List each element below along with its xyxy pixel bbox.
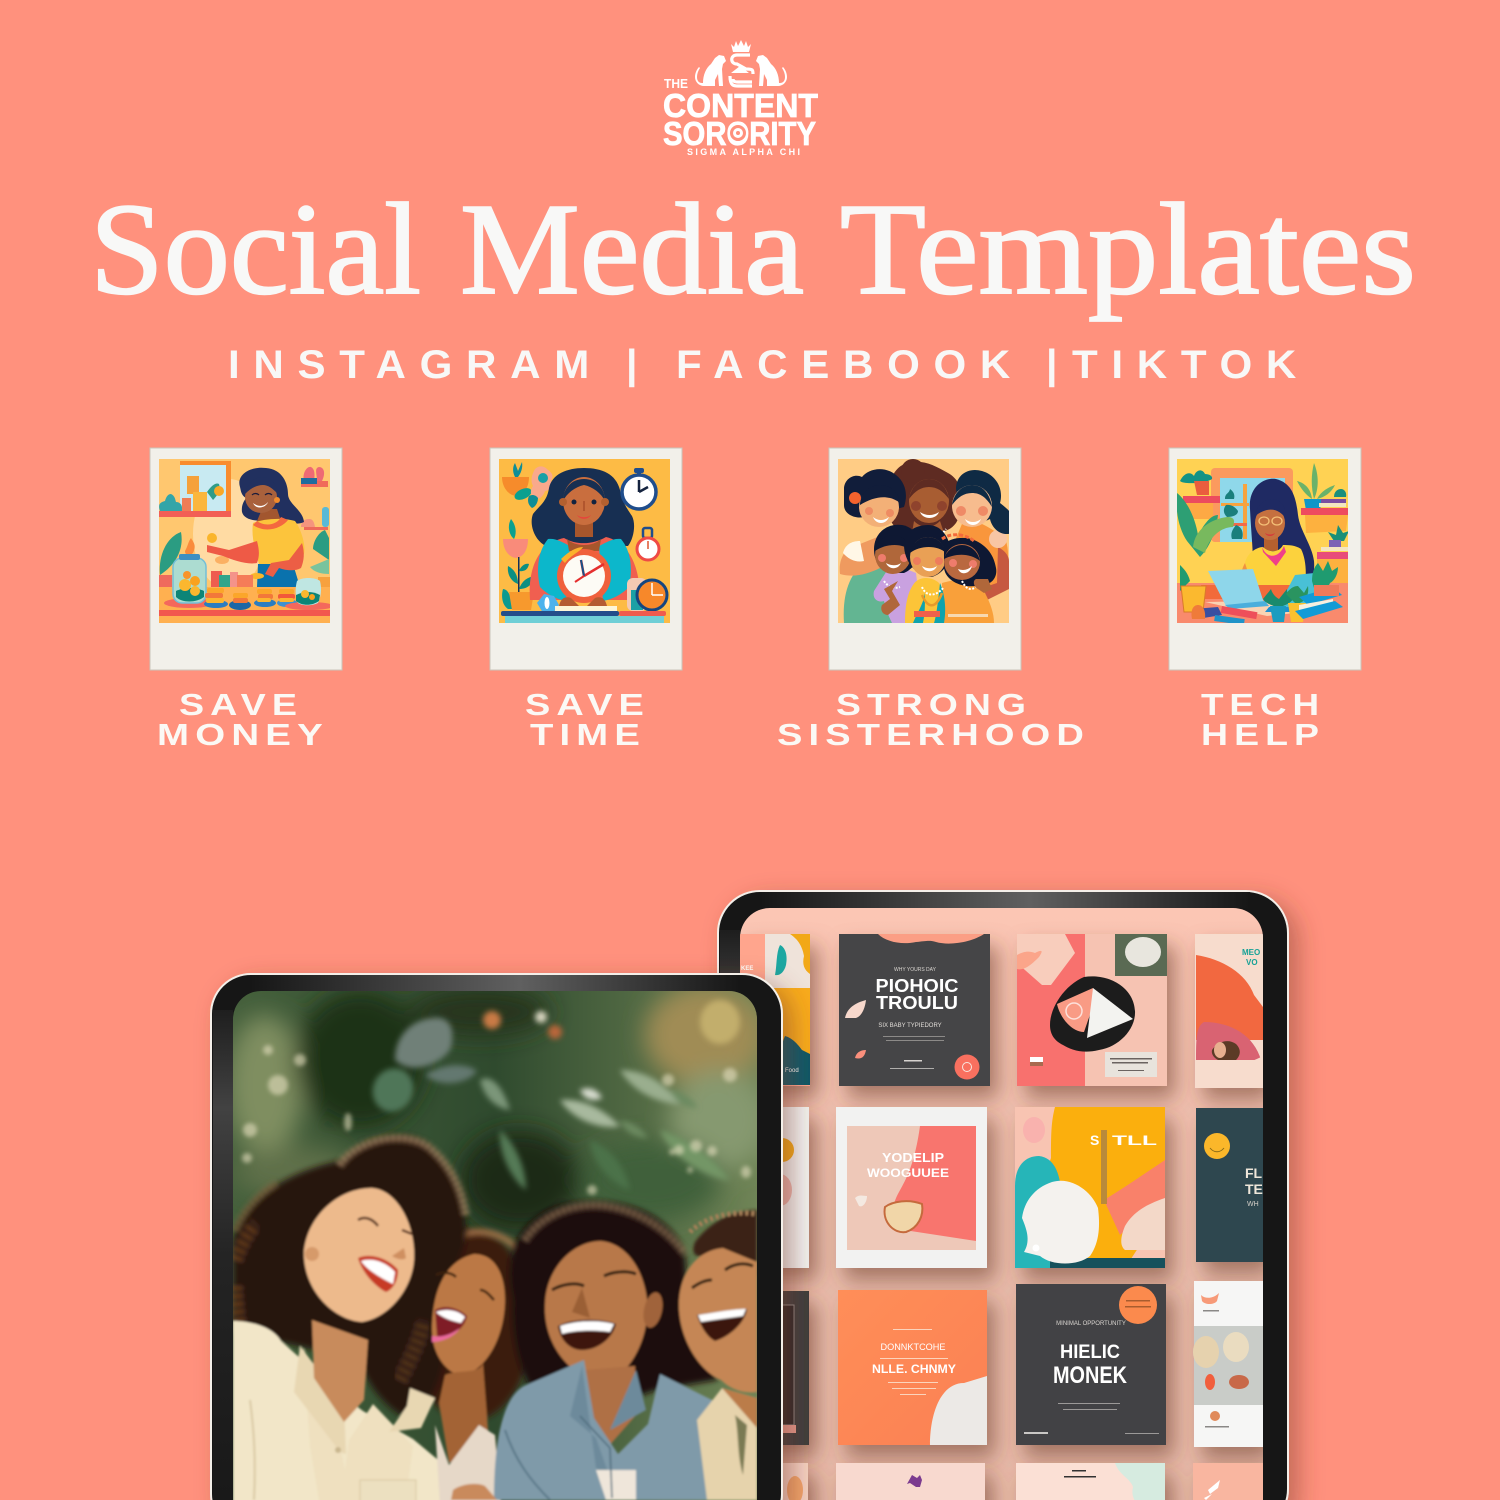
label: tech help [1201,687,1325,752]
logo word: Content: CONTENT [663,87,818,124]
foliage background [227,985,770,1230]
card: Piohoic Troulu: PIOHOIC [876,976,958,996]
person 3: denim jacket [492,1359,713,1500]
label: strong sisterhood: STRONG [836,687,1032,722]
person 4 [679,1210,757,1500]
card: Hielic Monek: MINIMAL OPPORTUNITY [1056,1321,1126,1327]
person 1: neck and face [304,1188,414,1422]
card: right partial hat: VO [1246,958,1258,967]
person 3: hair [510,1201,719,1410]
card: black stone on peach [1017,934,1167,1086]
card: left partial row 1: KEE [741,966,753,972]
front tablet: laughing friends photo [211,974,782,1500]
person 1: shirt [233,1321,447,1500]
illustration: woman counting coins [159,459,333,623]
panel: strong sisterhood polaroid [829,448,1021,670]
back tablet: template grid [718,891,1288,1500]
label: save money: SAVE [179,687,303,722]
panel: tech help polaroid [1169,448,1361,670]
subtitle: platforms: INSTAGRAM [228,343,603,387]
card: S'Till yellow abstract [1015,1107,1165,1268]
card: right partial dark teal: WH [1247,1201,1259,1208]
card: Piohoic Troulu: WHY YOURS DAY [894,967,937,973]
panel: save money polaroid [150,448,342,670]
card: left partial dark row 3 [783,1290,830,1468]
bokeh highlights [242,1045,751,1195]
card: Hielic Monek [1016,1284,1166,1445]
card: row 4 partials [740,1463,1263,1500]
label: save time [525,687,650,752]
foliage leaves [366,1000,740,1190]
label: save money [157,687,329,752]
subtitle: platforms [228,341,1310,387]
card: Piohoic Troulu [839,934,990,1086]
label: save time: SAVE [525,687,650,722]
label: strong sisterhood [777,687,1090,752]
label: save time: TIME [530,717,646,752]
illustration: group of six women [838,459,1014,623]
card: right partial dark teal: FL [1245,1165,1263,1181]
subtitle: platforms: | [1046,341,1057,387]
card: right partial hat [1195,934,1263,1088]
card: left partial row 1 [740,934,810,1086]
card: right partial dark teal [1196,1108,1263,1262]
card: S'Till yellow abstract: TLL [1112,1132,1158,1148]
icon: right panther [756,55,787,86]
title: Media [460,177,804,322]
hand [451,1484,497,1500]
panel: save time polaroid [490,448,682,670]
icon: crown [731,40,751,52]
label: save money: MONEY [157,717,329,752]
photo screen [227,985,770,1500]
card: Yodelip Wooguee: WOOGUUEE [867,1166,949,1180]
card: Hielic Monek: HIELIC [1060,1342,1120,1363]
person 2: face [432,1254,505,1500]
person 2 hair and back [429,1224,525,1420]
card: left partial row 2 [783,1106,830,1292]
title: Social [90,177,421,322]
illustration: woman at laptop [1176,459,1349,625]
card: Piohoic Troulu: TROULU [876,993,958,1013]
screen [740,908,1263,1500]
person 3: face [545,1241,666,1446]
person 1: curly hair [233,1135,466,1420]
icon: emblem S [730,55,753,86]
card: Yodelip Wooguee [836,1107,987,1268]
subtitle: platforms: | [626,341,637,387]
card: right partial food [1193,1281,1263,1447]
logo word: Sorority: SORORITY [663,115,816,152]
logo tagline: SIGMA ALPHA CHI [687,147,800,157]
subtitle: platforms: TIKTOK [1072,343,1310,387]
logo word: The: THE [664,76,688,91]
card: right partial hat: MEO [1242,948,1260,957]
illustration: woman holding clock [499,459,670,623]
card: Yodelip Wooguee: YODELIP [882,1150,944,1165]
card: Hielic Monek: MONEK [1053,1362,1128,1389]
logo: The Content Sorority [663,40,818,157]
card: Piohoic Troulu: SIX BABY TYPIEDORY [878,1023,942,1029]
card: orange template [838,1290,987,1445]
title [90,177,1416,322]
icon: left panther [695,55,726,86]
card: S'Till yellow abstract: S [1090,1132,1099,1148]
label: tech help: TECH [1201,687,1325,722]
title: Templates [840,177,1416,322]
label: tech help: HELP [1201,717,1325,752]
label: strong sisterhood: SISTERHOOD [777,717,1090,752]
people softly focused [233,1135,757,1500]
card: orange template: DONNKTCOHE [880,1342,946,1352]
card: orange template: NLLE. CHNMY [872,1362,956,1376]
card: right partial dark teal: TE [1245,1181,1263,1197]
icon: aperture [730,125,746,141]
card: left partial row 1: Food [785,1068,799,1074]
subtitle: platforms: FACEBOOK [676,343,1024,387]
